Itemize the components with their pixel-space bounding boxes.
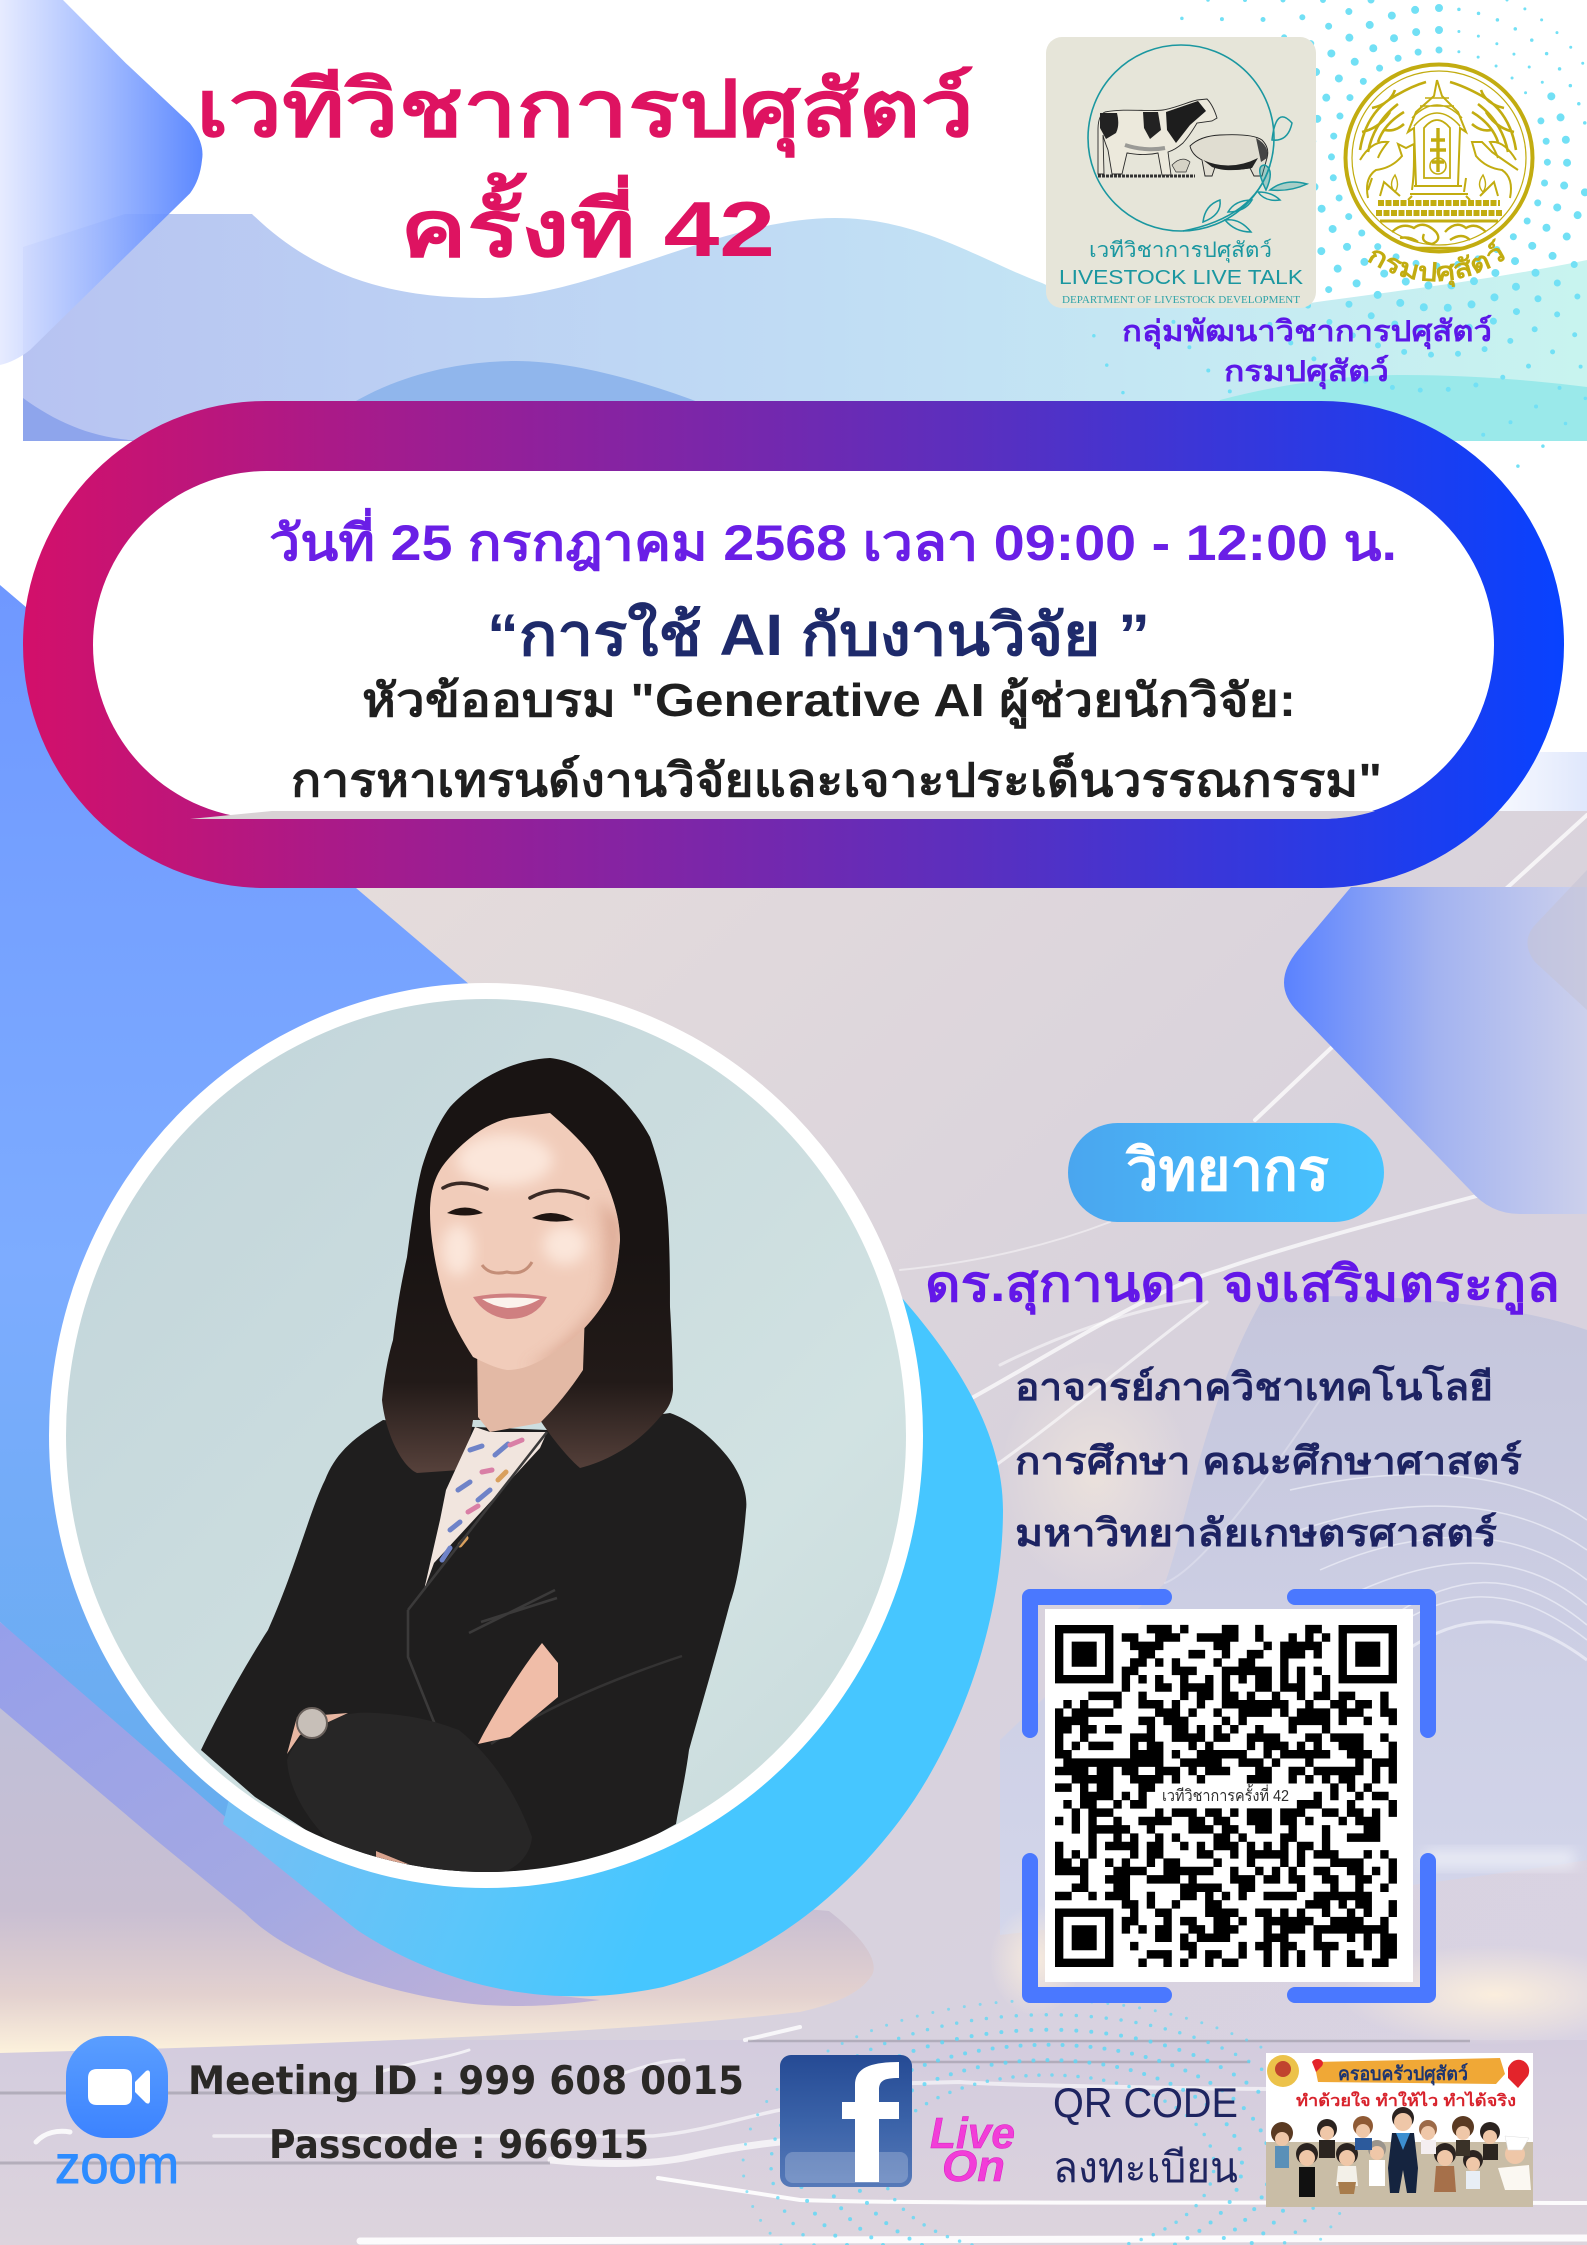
clouds: [1392, 225, 1486, 248]
badge: speaker label: วิทยากร: [1125, 1138, 1329, 1203]
title: [196, 65, 974, 273]
blouse: [424, 1427, 547, 1590]
brows: [443, 1183, 588, 1198]
QR modules: [1055, 1625, 1397, 1967]
label: QR code register: ลงทะเบียน: [1053, 2144, 1238, 2191]
hands: [478, 1643, 558, 1744]
meeting details: Passcode : 966915: [269, 2123, 649, 2168]
logo: Livestock Live Talk: LIVESTOCK LIVE TALK: [1059, 267, 1304, 289]
watch: [297, 1708, 327, 1738]
meeting details: Meeting ID : 999 608 0015: [188, 2059, 744, 2104]
icon: cow: [1098, 99, 1217, 176]
blazer: [201, 1413, 746, 1880]
meeting details: [188, 2059, 744, 2168]
header wave band: [23, 214, 1587, 441]
label: QR code register: QR CODE: [1053, 2079, 1238, 2126]
organisation label: [1122, 314, 1492, 389]
decorative dots bottom: [743, 2000, 1353, 2245]
eyes: [447, 1208, 574, 1222]
kranok scrolls: [1360, 82, 1426, 152]
shape: lavender ribbon: [0, 1622, 600, 2006]
speaker name: ดร.สุกานดา จงเสริมตระกูล: [925, 1256, 1560, 1315]
nose: [482, 1262, 532, 1273]
training subject: การหาเทรนด์งานวิจัยและเจาะประเด็นวรรณกรรม": [291, 752, 1382, 806]
label: QR code register: [1053, 2079, 1238, 2191]
cartoon people: [1271, 2107, 1531, 2197]
QR frame corners: [1030, 1597, 1428, 1995]
hair: [382, 1058, 673, 1473]
portrait: [49, 980, 930, 1890]
icon: pig: [1172, 135, 1268, 176]
speaker affiliation: [1015, 1364, 1523, 1555]
image: livestock family banner: ครอบครัวปศุสัตว์: [1338, 2063, 1468, 2086]
speaker affiliation: การศึกษา คณะศึกษาศาสตร์: [1015, 1440, 1523, 1483]
shape: grey inner diamond: [1528, 870, 1587, 1010]
title: เวทีวิชาการปศุสัตว์: [196, 65, 974, 158]
shape: top-left blue blade: [0, 0, 202, 365]
icon: Zoom logo: zoom: [55, 2135, 179, 2195]
shape: left blue diamond: [0, 585, 470, 1824]
training subject: หัวข้ออบรม "Generative AI ผู้ช่วยนักวิจัย:: [362, 674, 1296, 729]
icon: teal leaves: [1183, 117, 1307, 232]
logo: Department of Livestock seal: [1346, 64, 1532, 252]
speaker affiliation: มหาวิทยาลัยเกษตรศาสตร์: [1015, 1512, 1498, 1555]
QR centre label: เวทีวิชาการครั้งที่ 42: [1162, 1784, 1289, 1805]
face: [430, 1113, 620, 1370]
icon: Zoom logo: [55, 2036, 179, 2195]
topic heading: “การใช้ AI กับงานวิจัย ”: [487, 601, 1150, 668]
speaker affiliation: อาจารย์ภาควิชาเทคโนโลยี: [1015, 1364, 1493, 1409]
logo: Livestock Live Talk: [1046, 37, 1316, 308]
mouth: [473, 1294, 547, 1319]
logo: Livestock Live Talk: เวทีวิชาการปศุสัตว์: [1089, 238, 1272, 263]
lapels and sleeves: [408, 1432, 557, 1737]
logo: Livestock Live Talk: DEPARTMENT OF LIVESTOCK DEVELOPMENT: [1062, 295, 1300, 306]
image: livestock family banner: [1266, 2053, 1533, 2207]
label: Live On: On: [942, 2142, 1005, 2191]
title: ครั้งที่ 42: [400, 172, 775, 273]
base rows: [1376, 203, 1502, 213]
shape: right blue diamond: [1284, 887, 1587, 1214]
image: livestock family banner: ทำด้วยใจ ทำให้ไว ทำได้จริง: [1296, 2091, 1516, 2110]
badge: speaker label: [1068, 1123, 1384, 1222]
organisation label: กรมปศุสัตว์: [1224, 354, 1389, 389]
date and time: วันที่ 25 กรกฎาคม 2568 เวลา 09:00 - 12:00 น.: [269, 508, 1397, 571]
cow and horse: [1367, 144, 1414, 198]
training subject: [291, 674, 1382, 806]
organisation label: กลุ่มพัฒนาวิชาการปศุสัตว์: [1122, 314, 1492, 349]
label: Live On: [930, 2109, 1015, 2191]
neck: [477, 1328, 584, 1432]
decorative dots top right: [1076, 0, 1587, 518]
face shading: [442, 1134, 622, 1368]
QR code with frame: [1030, 1597, 1428, 1995]
label: seal caption: กรมปศุสัตว์: [1368, 238, 1505, 288]
label: Live On: Live: [930, 2109, 1015, 2158]
panel: gradient pill: [23, 401, 1564, 888]
shape: sky blue blob behind portrait: [223, 1298, 1003, 1996]
icon: Facebook logo: [780, 2055, 912, 2187]
